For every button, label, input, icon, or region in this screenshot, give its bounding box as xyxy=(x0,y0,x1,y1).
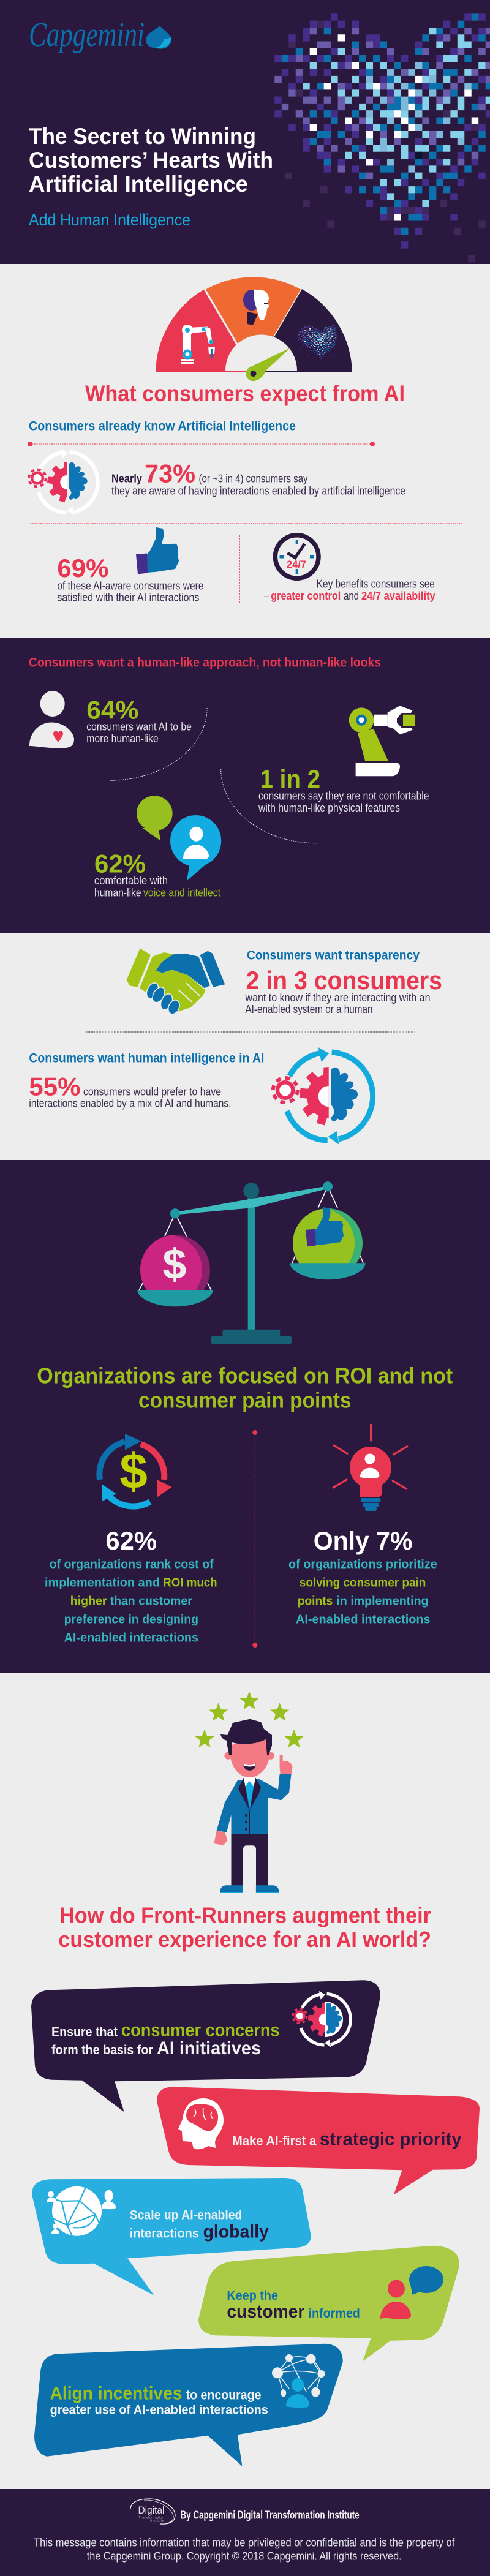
icon: person with heart xyxy=(29,691,74,748)
disclaimer: the Capgemini Group. Copyright © 2018 Capgemini. All rights reserved. xyxy=(87,2550,402,2562)
callout: customer informed xyxy=(198,2246,459,2362)
text: key benefits: and xyxy=(344,589,359,602)
callout: scale globally: interactions xyxy=(130,2226,199,2240)
callout: scale globally xyxy=(32,2178,311,2295)
text: key benefits xyxy=(264,578,435,602)
text: transparency: Consumers want transparency xyxy=(247,948,420,963)
panel: human-like approach xyxy=(0,638,490,933)
subtitle: Add Human Intelligence xyxy=(29,211,190,229)
callout: consumer concerns: consumer concerns xyxy=(121,2020,280,2040)
heading: customer experience for an AI world? xyxy=(58,1927,431,1952)
icon: clock 24/7: 24/7 xyxy=(287,559,306,570)
dotted divider with end dots xyxy=(28,442,375,446)
stat: 69% satisfied: of these AI-aware consumers were xyxy=(57,579,203,592)
byline: By Capgemini Digital Transformation Institute xyxy=(180,2509,360,2521)
icon: gear and brain cycle xyxy=(273,1047,373,1145)
callout: align incentives: to encourage xyxy=(186,2388,261,2402)
stat: 62% of organizations: preference in designing xyxy=(64,1613,198,1627)
icon: dollar cycle: $ xyxy=(119,1444,148,1499)
stat: 1 in 2: with human-like physical features xyxy=(258,801,400,814)
text: transparency: want to know if they are interacting with an xyxy=(245,991,430,1004)
stat: 64% xyxy=(86,695,192,745)
callout: strategic priority xyxy=(157,2087,480,2194)
stat: only 7% of organizations: solving consumer pain xyxy=(300,1575,426,1590)
callout: customer informed: customer xyxy=(227,2302,305,2322)
icon: clock 24/7 xyxy=(275,535,318,578)
panel: front-runners xyxy=(0,1673,490,2489)
stat: 62%: comfortable with xyxy=(94,874,168,887)
stat: 62% of organizations xyxy=(45,1526,217,1645)
text: key benefits: Key benefits consumers see xyxy=(317,578,435,590)
scale: dollar coin: $ xyxy=(163,1240,186,1288)
panel: header xyxy=(0,0,490,264)
heading: consumer pain points xyxy=(138,1388,352,1413)
scale: thumbs-up coin xyxy=(285,1207,366,1279)
icon: light bulb with person xyxy=(333,1425,407,1511)
stat: 62% of organizations: 62% xyxy=(105,1526,157,1555)
callout: scale globally: Scale up AI-enabled xyxy=(130,2208,242,2222)
title: Customers’ Hearts With xyxy=(29,148,273,173)
gauge segment: heart xyxy=(254,289,352,372)
panel: what consumers expect from AI xyxy=(0,264,490,638)
callout: consumer concerns: AI initiatives xyxy=(157,2038,261,2058)
callout: align incentives: Align incentives xyxy=(50,2383,182,2403)
text: transparency: 2 in 3 consumers xyxy=(246,966,442,995)
icon: speech bubbles with person xyxy=(137,796,221,881)
icon: robot arm xyxy=(349,706,415,776)
gauge hub xyxy=(225,334,297,371)
callout: align incentives xyxy=(34,2344,343,2466)
panel: organizations focus on ROI xyxy=(0,1160,490,1673)
logo: Capgemini: Capgemini xyxy=(29,16,145,54)
callout: align incentives: greater use of AI-enabled interactions xyxy=(50,2403,268,2417)
subheading: Consumers already know Artificial Intelligence xyxy=(29,419,296,434)
stat: 62% of organizations: ROI much xyxy=(163,1575,217,1590)
text: human intelligence: Consumers want human intelligence in AI xyxy=(29,1050,264,1065)
gauge xyxy=(156,276,352,381)
stat: 1 in 2 xyxy=(258,764,429,814)
callout: customer informed: informed xyxy=(309,2307,360,2321)
callout: customer informed: Keep the xyxy=(227,2289,278,2303)
callout: scale globally: globally xyxy=(203,2221,269,2242)
disclaimer xyxy=(34,2536,455,2562)
icon: dollar cycle xyxy=(99,1434,172,1506)
stat: 69% satisfied: 69% xyxy=(57,554,108,582)
title xyxy=(29,124,273,197)
stat: 62%: human-like xyxy=(94,886,141,898)
heading: What consumers expect from AI xyxy=(85,381,405,406)
stat: 1 in 2: 1 in 2 xyxy=(260,764,320,793)
text: key benefits: greater control xyxy=(271,589,341,602)
stat: only 7% of organizations: of organizations prioritize xyxy=(288,1557,437,1571)
illustration: man in suit xyxy=(214,1719,293,1893)
divider with end dots xyxy=(252,1430,257,1648)
heading xyxy=(58,1902,431,1952)
logo: Digital Transformation Institute xyxy=(130,2499,175,2524)
text: transparency xyxy=(245,948,442,1015)
stat: only 7% of organizations: in implementing xyxy=(337,1594,429,1608)
icon: gear and brain xyxy=(293,1991,350,2047)
stat: only 7% of organizations: AI-enabled interactions xyxy=(296,1613,431,1627)
stat: 62% of organizations: of organizations rank cost of xyxy=(50,1557,214,1571)
stat: only 7% of organizations: points xyxy=(298,1594,333,1608)
icon: pixel heart xyxy=(274,13,490,262)
stat: 62% xyxy=(94,849,221,898)
heading: Organizations are focused on ROI and not xyxy=(37,1363,453,1388)
icon: network with person xyxy=(272,2354,325,2408)
stat: 1 in 2: consumers say they are not comfortable xyxy=(258,789,429,802)
icon: person and speech bubble xyxy=(380,2266,443,2319)
text: key benefits: – xyxy=(264,589,270,602)
callout: consumer concerns: Ensure that xyxy=(51,2025,118,2039)
title: Artificial Intelligence xyxy=(29,171,248,197)
icon: thumbs up xyxy=(136,527,179,574)
panel: transparency and human intelligence xyxy=(0,933,490,1160)
stat: 62% of organizations: than customer xyxy=(110,1594,192,1608)
stat: 64%: more human-like xyxy=(86,732,159,745)
text: human intelligence: 55% xyxy=(29,1072,80,1101)
icon: gear and brain xyxy=(29,448,98,516)
text: human intelligence: interactions enabled by a mix of AI and humans. xyxy=(29,1097,231,1110)
panel: footer xyxy=(0,2489,490,2576)
heading: How do Front-Runners augment their xyxy=(59,1902,431,1927)
text: key benefits: 24/7 availability xyxy=(361,589,435,602)
scale: dollar coin xyxy=(132,1235,213,1306)
illustration: stars xyxy=(195,1692,304,1747)
stat: 73% aware: 73% xyxy=(145,459,195,488)
stat: 62% of organizations: AI-enabled interactions xyxy=(64,1631,198,1645)
logo: Digital Transformation Institute: Institute xyxy=(150,2518,164,2523)
stat: 62% of organizations: higher xyxy=(70,1594,107,1608)
callout: strategic priority: strategic priority xyxy=(320,2130,462,2150)
stat: 73% aware: they are aware of having interactions enabled by artificial intelligence xyxy=(111,484,405,497)
icon: handshake xyxy=(127,948,225,1016)
stat: only 7% of organizations xyxy=(288,1526,437,1627)
stat: 62% of organizations: implementation and xyxy=(45,1575,160,1590)
gauge segment: robot arm xyxy=(156,289,254,372)
disclaimer: This message contains information that may be privileged or confidential and is the property of xyxy=(34,2536,455,2548)
gauge needle xyxy=(246,348,290,381)
logo: Digital Transformation Institute: Digital xyxy=(138,2504,164,2516)
gauge segment: face xyxy=(205,276,302,372)
text: transparency: AI-enabled system or a human xyxy=(245,1003,372,1015)
logo: Digital Transformation Institute: Transformation xyxy=(138,2515,164,2520)
title: The Secret to Winning xyxy=(29,124,256,149)
stat: 73% aware xyxy=(111,459,405,497)
callout: strategic priority: Make AI-first a xyxy=(232,2134,317,2149)
icon: head with brain xyxy=(178,2098,224,2149)
stat: 62%: 62% xyxy=(94,849,146,878)
callout: consumer concerns xyxy=(31,1980,380,2112)
stat: 64%: consumers want AI to be xyxy=(86,720,192,733)
stat: 69% satisfied xyxy=(57,554,203,604)
stat: 69% satisfied: satisfied with their AI interactions xyxy=(57,590,199,604)
callout: consumer concerns: form the basis for xyxy=(51,2043,153,2057)
stat: 62%: voice and intellect xyxy=(143,886,221,898)
text: human intelligence: consumers would prefer to have xyxy=(83,1085,221,1098)
heading xyxy=(37,1363,453,1413)
illustration: balance scale xyxy=(132,1181,366,1344)
stat: 73% aware: (or ~3 in 4) consumers say xyxy=(198,472,308,485)
icon: globe with people xyxy=(47,2186,116,2236)
stat: 64%: 64% xyxy=(86,695,138,724)
stat: only 7% of organizations: Only 7% xyxy=(314,1526,413,1555)
stat: 73% aware: Nearly xyxy=(111,472,143,485)
heading: Consumers want a human-like approach, not human-like looks xyxy=(29,655,381,669)
text: human intelligence xyxy=(29,1050,264,1110)
